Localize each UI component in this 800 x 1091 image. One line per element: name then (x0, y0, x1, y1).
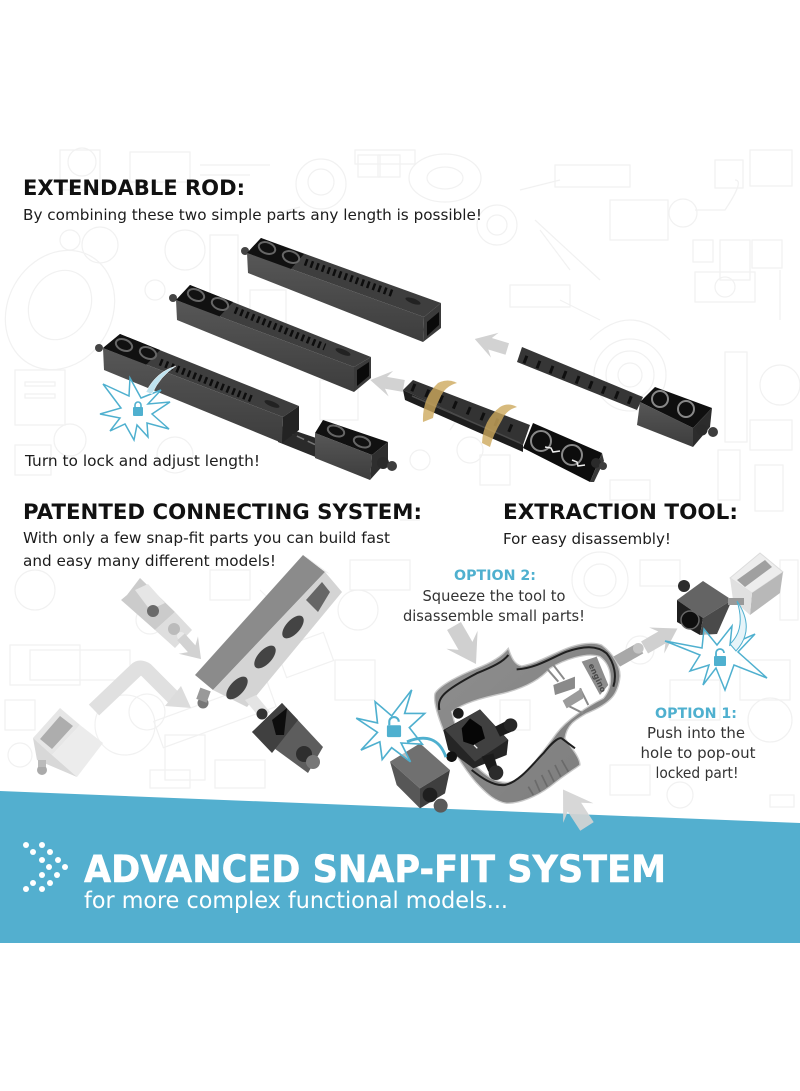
rod 1 (241, 238, 441, 342)
arrow to right rod (471, 327, 511, 361)
arrow: squeeze down (438, 617, 492, 673)
heading: patented connecting system: PATENTED CONNECTING SYSTEM: (23, 500, 422, 524)
rod 3 assembled (95, 334, 397, 480)
arrow: tool to cube (637, 616, 685, 660)
cube pair upper right (677, 553, 783, 635)
middle rod with gold bands (403, 380, 607, 482)
heading: extendable rod: EXTENDABLE ROD: (23, 176, 245, 200)
arrow between rods (368, 367, 406, 399)
text: option 1: Push into the (647, 724, 745, 742)
text: extendable rod description: By combining these two simple parts any length is possible! (23, 206, 482, 224)
snap-fit part: light cube (33, 708, 103, 777)
snap-fit part: long block (195, 555, 342, 718)
text: option 2: OPTION 2: (454, 568, 536, 584)
text: option 1: locked part! (656, 764, 738, 782)
banner title: ADVANCED SNAP-FIT SYSTEM (84, 848, 666, 891)
right rod part (517, 347, 718, 447)
extraction tool: engino (586, 662, 608, 694)
arrow: squeeze up (548, 780, 602, 836)
text: option 2: disassemble small parts! (403, 607, 585, 625)
background doodle pattern (0, 148, 800, 808)
text: connecting system description: and easy many different models! (23, 552, 276, 570)
text: lock caption: Turn to lock and adjust length! (24, 452, 260, 470)
text: option 1: OPTION 1: (655, 706, 737, 722)
extraction tool (390, 643, 644, 813)
text: option 2: Squeeze the tool to (422, 587, 566, 605)
lock starburst lower left (356, 690, 446, 762)
lock starburst upper right (665, 601, 767, 690)
banner subtitle: for more complex functional models... (84, 888, 508, 914)
text: option 1: hole to pop-out (640, 744, 756, 762)
text: extraction tool description: For easy disassembly! (503, 530, 671, 548)
arrow: clip into block (171, 628, 211, 668)
heading: extraction tool: EXTRACTION TOOL: (503, 500, 738, 524)
text: connecting system description: With only a few snap-fit parts you can build fast (23, 529, 390, 547)
snap-fit part: small dark block (252, 703, 323, 773)
snap-fit part: top clip (121, 578, 192, 648)
lock starburst with curved arrow on rod (100, 366, 176, 440)
L-shaped arrow (94, 668, 191, 710)
banner background (0, 791, 800, 943)
icon: dotted chevrons (23, 842, 68, 892)
rod 2 (169, 285, 371, 392)
